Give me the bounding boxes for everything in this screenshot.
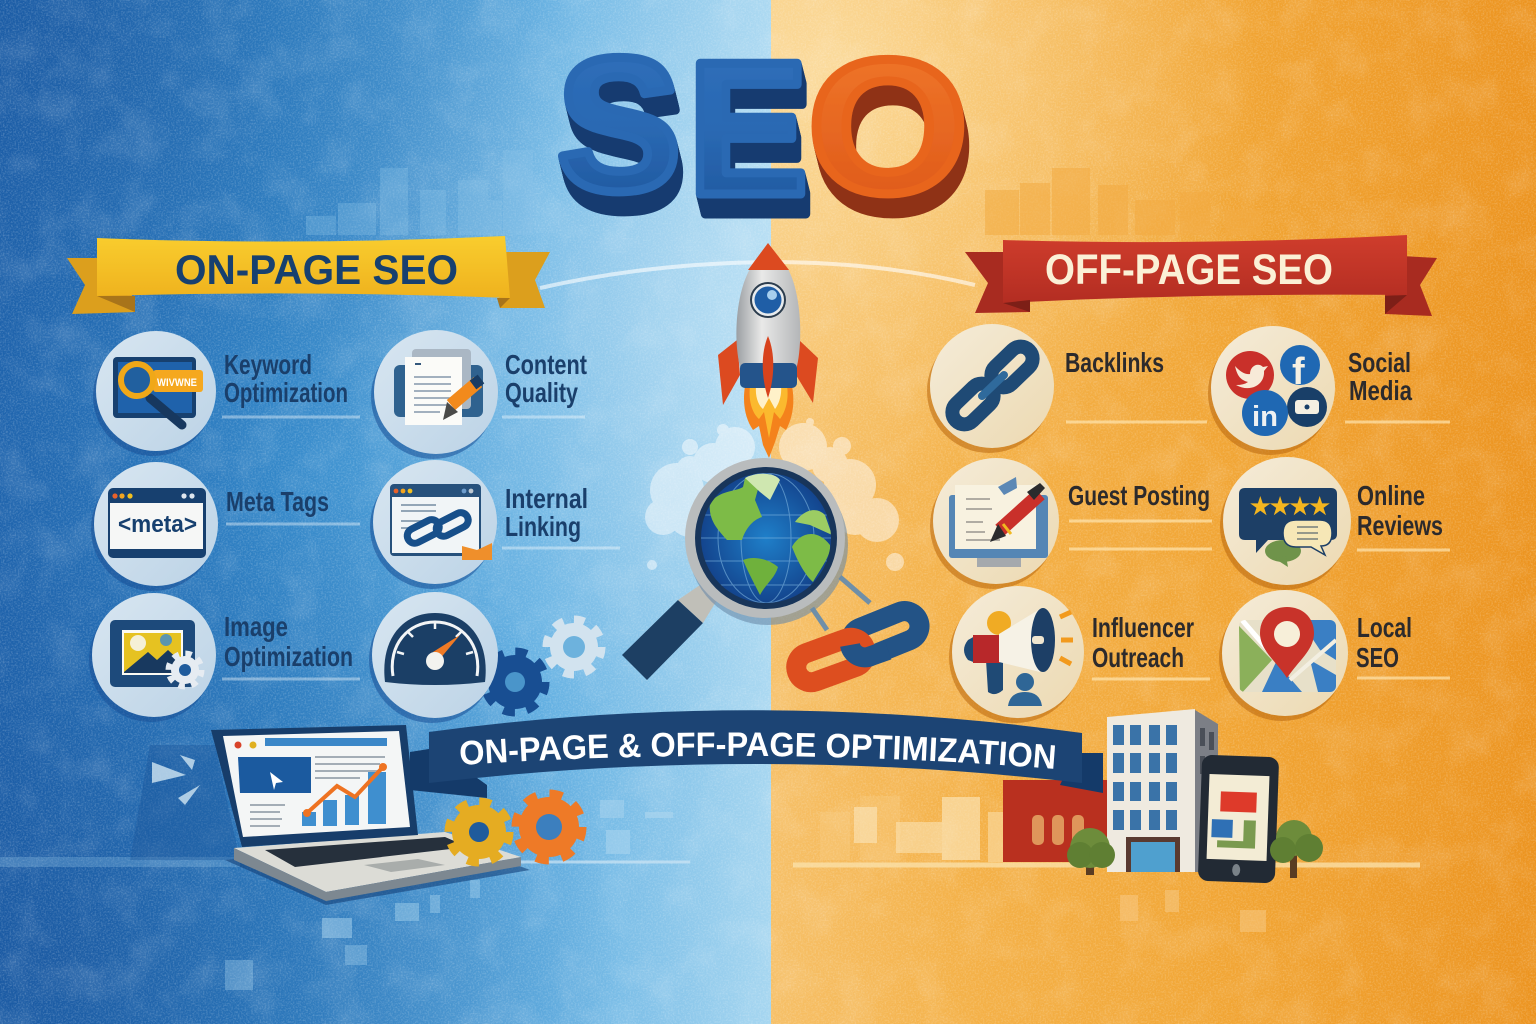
icon: orange gear [519, 797, 579, 857]
label: social media [1348, 347, 1412, 406]
icon: yellow gear [451, 804, 507, 860]
icon: page speed gauge [369, 592, 498, 723]
ribbon: on-page SEO [67, 236, 550, 314]
smoke cloud [645, 418, 904, 571]
label: local SEO: SEO [1356, 642, 1399, 673]
icon: internal linking [370, 460, 497, 589]
icon: navy gear [487, 654, 543, 710]
label: social media: Media [1349, 375, 1412, 406]
label: keyword optimization: Keyword [224, 349, 312, 380]
illustration: laptop with analytics [211, 725, 530, 905]
label: keyword optimization [224, 349, 348, 408]
panel: blue on-page background [0, 0, 771, 1024]
icon: guest posting [930, 458, 1059, 589]
icon: influencer outreach megaphone [949, 586, 1084, 723]
label: image optimization: Image [224, 611, 288, 642]
left faint skyline [306, 150, 533, 235]
label: content quality [505, 349, 587, 408]
heading: on-page SEO: ON-PAGE SEO [175, 246, 458, 293]
icon: meta tags: <meta> [118, 511, 197, 538]
icon: meta tags [91, 462, 218, 591]
label: content quality: Quality [505, 377, 578, 408]
label: backlinks: Backlinks [1065, 347, 1164, 378]
illustration: smartphone [1198, 755, 1279, 883]
icon: keyword optimization: WIVWNE [157, 377, 197, 389]
icon: local SEO map pin [1219, 590, 1348, 721]
title: SEO: E [688, 23, 808, 235]
icon: keyword optimization [93, 331, 216, 456]
icon: social media: f [1292, 351, 1305, 393]
label: internal linking: Internal [505, 483, 588, 514]
banner: on-page and off-page optimization [410, 710, 1103, 798]
ribbon: off-page SEO [965, 235, 1437, 316]
left faint city blocks and ground [0, 800, 690, 990]
label: social media: Social [1348, 347, 1411, 378]
heading: off-page SEO: OFF-PAGE SEO [1045, 246, 1333, 294]
icon: backlinks chain [927, 324, 1054, 453]
icon: online reviews [1220, 457, 1351, 590]
right faint city and ground [793, 780, 1420, 932]
title: SEO [557, 19, 968, 235]
icon: image optimization [89, 593, 216, 722]
icon: content quality [371, 330, 498, 459]
panel: orange off-page background [771, 0, 1536, 1024]
icon: left tree [1067, 828, 1115, 875]
label: meta tags: Meta Tags [226, 486, 329, 517]
icon: rocket [718, 243, 818, 458]
label: influencer outreach: Influencer [1092, 612, 1194, 643]
label: image optimization: Optimization [224, 641, 353, 672]
label: internal linking [505, 483, 588, 542]
label: influencer outreach [1092, 612, 1194, 673]
label: guest posting: Guest Posting [1068, 480, 1210, 511]
title: SEO: S [557, 19, 681, 231]
title: SEO: O [808, 21, 968, 233]
icon: social media: in [1252, 401, 1278, 433]
horizon arc lines [540, 262, 975, 288]
label: local SEO: Local [1357, 612, 1412, 643]
label: online reviews [1357, 480, 1443, 541]
label: local SEO [1356, 612, 1412, 673]
icon: magnifying glass with globe [622, 458, 848, 680]
illustration: office building [1107, 709, 1218, 872]
label: content quality: Content [505, 349, 587, 380]
banner text: ON-PAGE & OFF-PAGE OPTIMIZATION [460, 732, 1055, 769]
icon: light gear [549, 622, 599, 672]
dark silhouette behind laptop [130, 745, 240, 860]
divider lines [222, 417, 1450, 679]
label: influencer outreach: Outreach [1092, 642, 1184, 673]
label: keyword optimization: Optimization [224, 377, 348, 408]
label: online reviews: Reviews [1357, 510, 1443, 541]
label: image optimization [224, 611, 353, 672]
icon: online reviews: ★★★★ [1250, 493, 1330, 519]
icon: burst lines [152, 755, 200, 805]
icon: social media [1208, 326, 1335, 455]
icon: right tree [1270, 820, 1323, 878]
icon: red and blue chain link [792, 607, 924, 686]
label: online reviews: Online [1357, 480, 1425, 511]
label: internal linking: Linking [505, 511, 581, 542]
icon: chain connectors [812, 577, 870, 630]
right faint skyline [985, 168, 1261, 235]
